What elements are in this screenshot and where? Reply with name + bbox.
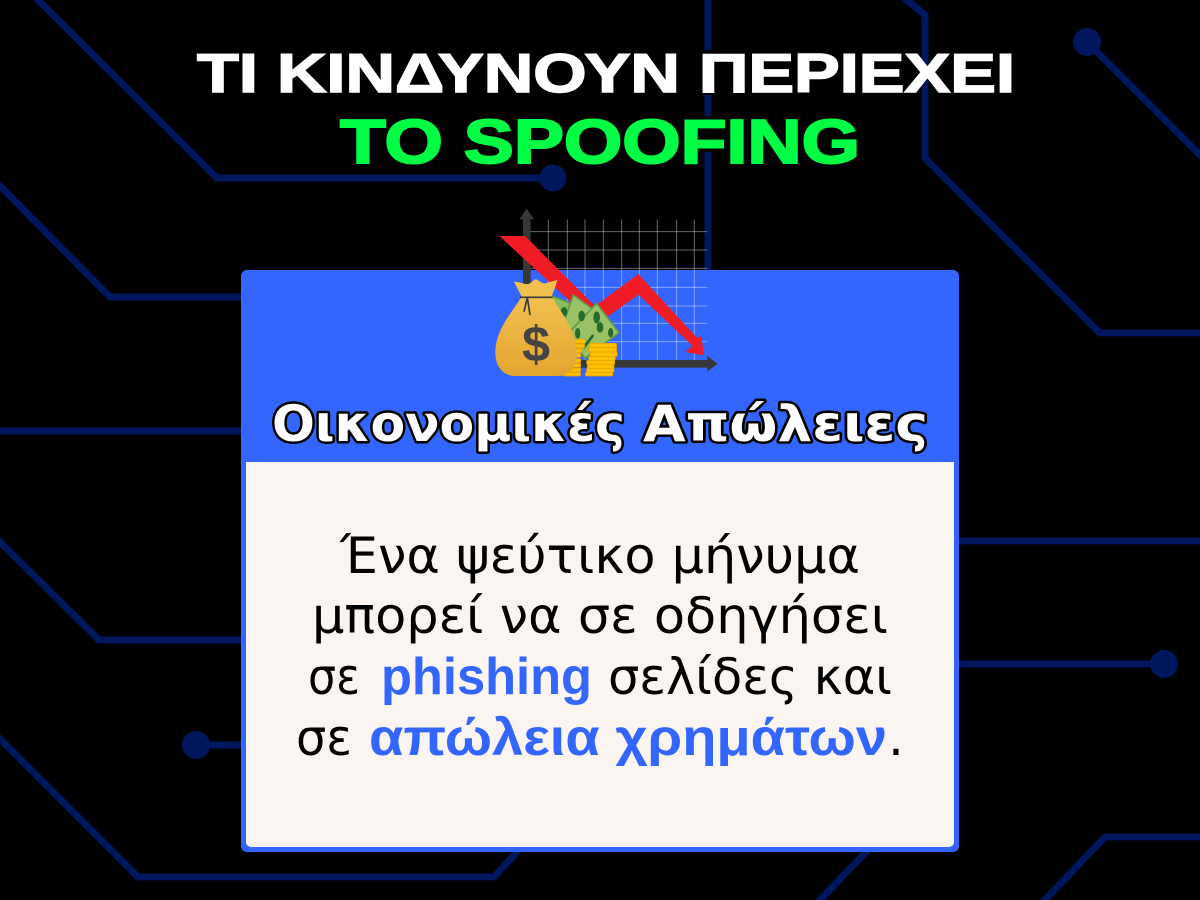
gold coins xyxy=(563,339,617,376)
line 2: μπορεί να σε οδηγήσει xyxy=(312,587,888,645)
dollar sign: $ xyxy=(522,316,550,372)
title line 2: ΤΟ SPOOFING xyxy=(340,108,860,177)
panel heading: Οικονομικές xyxy=(272,395,625,453)
line 4: . xyxy=(888,709,904,767)
red falling arrow xyxy=(499,236,704,355)
chart grid xyxy=(530,219,707,360)
title xyxy=(197,42,1015,177)
line 3: σε xyxy=(308,648,360,706)
line 4: σε xyxy=(296,709,352,767)
chart axes xyxy=(519,209,718,372)
panel heading xyxy=(272,395,928,453)
line 3: σελίδες και xyxy=(608,648,892,706)
body text xyxy=(296,527,904,767)
line 4: απώλεια χρημάτων xyxy=(369,709,887,767)
icon: money bag with falling chart xyxy=(495,209,718,376)
panel: financial losses xyxy=(241,209,959,852)
bag tie xyxy=(520,297,553,315)
line 1: Ένα ψεύτικο μήνυμα xyxy=(339,527,860,585)
line 3 xyxy=(308,648,892,706)
panel body background xyxy=(246,462,954,847)
title line 1: ΤΙ ΚΙΝΔΥΝΟΥΝ ΠΕΡΙΕΧΕΙ xyxy=(197,42,1015,104)
line 3: phishing xyxy=(381,648,592,706)
panel header background xyxy=(241,270,959,852)
money bag xyxy=(495,297,577,376)
panel heading: Απώλειες xyxy=(643,395,928,453)
banknotes xyxy=(552,295,619,358)
